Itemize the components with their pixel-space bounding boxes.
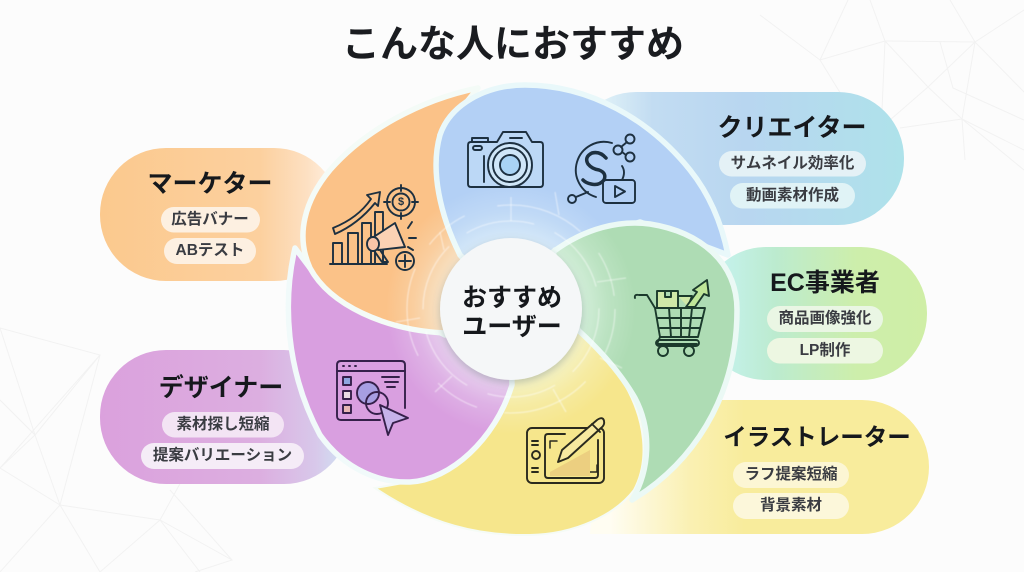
heading: EC: EC事業者 xyxy=(770,269,880,297)
icon: social video xyxy=(568,134,635,203)
icon: design browser xyxy=(337,361,408,435)
chip: video material xyxy=(730,183,855,208)
icon: marketing chart: $ xyxy=(398,196,404,208)
panel: EC xyxy=(700,247,927,380)
panel: illustrator xyxy=(590,400,929,534)
chip: proposal variations: 提案バリエーション xyxy=(153,446,292,464)
icon: marketing chart xyxy=(330,185,418,270)
icon: camera xyxy=(468,132,543,187)
panel: marketer xyxy=(100,148,340,281)
center glow with circuit rings xyxy=(386,184,636,434)
petal: orange xyxy=(303,88,510,333)
icon: pen tablet xyxy=(527,418,604,483)
center label: おすすめ xyxy=(462,284,562,312)
chip: thumbnails: サムネイル効率化 xyxy=(731,154,855,172)
chip: material search: 素材探し短縮 xyxy=(176,414,270,433)
panel: designer xyxy=(100,350,350,484)
panel: creator xyxy=(570,92,904,225)
chip: video material: 動画素材作成 xyxy=(746,185,839,204)
chip: background material: 背景素材 xyxy=(760,495,822,514)
icon: shopping cart xyxy=(635,280,709,356)
petal: blue xyxy=(436,85,728,300)
chip: LP production: LP制作 xyxy=(800,341,851,359)
chip: product images: 商品画像強化 xyxy=(778,309,872,327)
chip: AB test xyxy=(164,238,256,264)
heading: creator: クリエイター xyxy=(717,114,867,142)
center circle xyxy=(440,238,582,380)
petal: green xyxy=(553,223,737,500)
chip: rough proposals xyxy=(733,462,849,488)
chip: thumbnails xyxy=(719,151,866,176)
chip: material search xyxy=(162,412,284,438)
chip: LP production xyxy=(767,338,883,364)
chip: AB test: ABテスト xyxy=(176,242,244,259)
title: こんな人におすすめ xyxy=(342,24,684,66)
chip: background material xyxy=(733,493,849,519)
chip: product images xyxy=(767,306,883,332)
heading: designer: デザイナー xyxy=(159,373,283,402)
heading: marketer: マーケター xyxy=(147,170,273,198)
petal: purple xyxy=(288,248,512,482)
chip: banner ads xyxy=(161,207,260,232)
chip: rough proposals: ラフ提案短縮 xyxy=(744,464,838,483)
center circle: ユーザー xyxy=(462,313,562,341)
chip: banner ads: 広告バナー xyxy=(171,210,249,228)
petal: yellow xyxy=(375,310,644,535)
heading: illustrator: イラストレーター xyxy=(723,424,911,450)
chip: proposal variations xyxy=(141,443,304,469)
